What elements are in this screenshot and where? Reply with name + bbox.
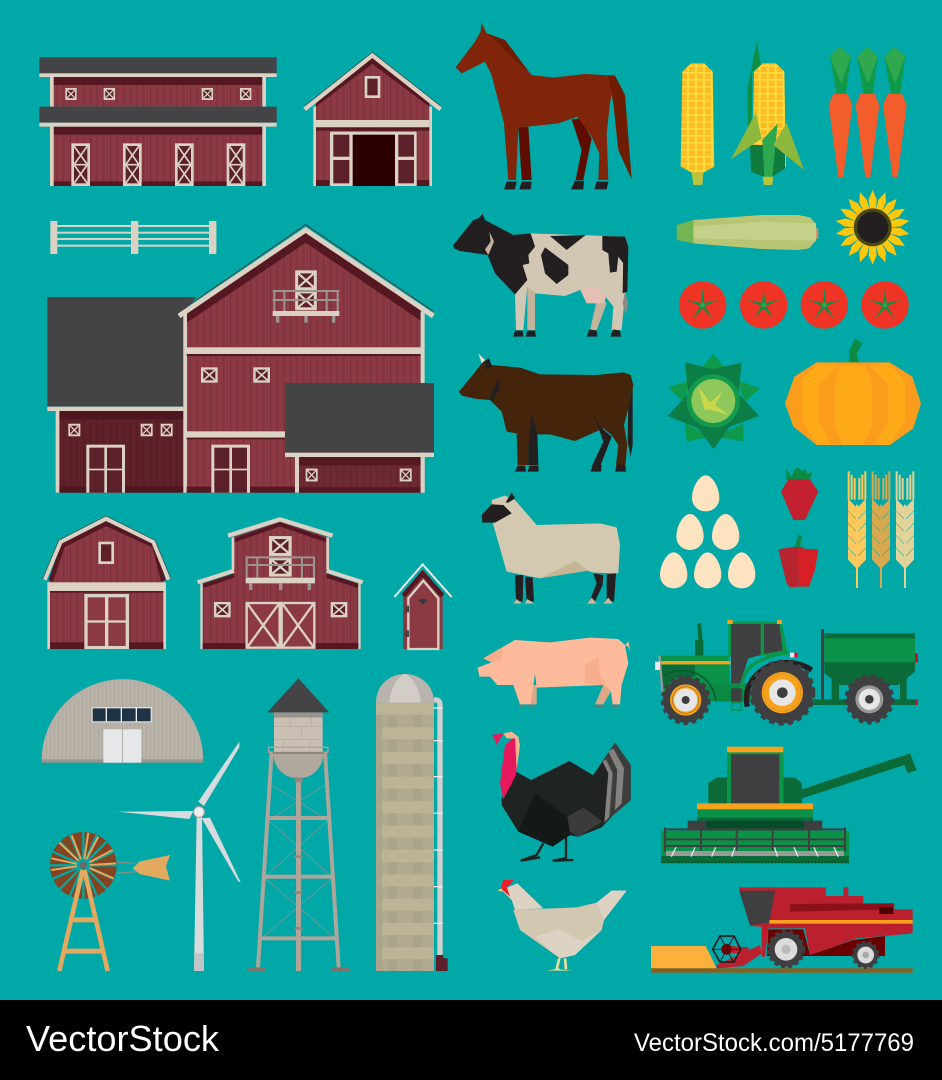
dairy cow bbox=[453, 214, 628, 337]
barn: gambrel small bbox=[43, 516, 171, 649]
combine small wheel bbox=[853, 942, 879, 968]
front tractor wheel bbox=[662, 676, 709, 724]
strawberry bbox=[781, 467, 818, 520]
carrots bbox=[829, 47, 907, 177]
fence bbox=[50, 221, 216, 254]
cabbage bbox=[668, 354, 760, 449]
barn: large main barn bbox=[47, 225, 434, 493]
pumpkin bbox=[785, 338, 921, 445]
tomatoes bbox=[679, 281, 909, 329]
footer url: VectorStock.com/5177769 bbox=[634, 1029, 914, 1057]
footer bar bbox=[0, 1000, 942, 1080]
outhouse bbox=[394, 564, 452, 649]
water tower bbox=[248, 678, 349, 971]
wind turbine bbox=[118, 742, 241, 971]
quonset hut bbox=[42, 679, 203, 763]
wheat bbox=[848, 471, 914, 588]
loft door and balcony bbox=[273, 270, 339, 323]
turkey bbox=[492, 732, 631, 861]
corn cob bbox=[681, 63, 714, 185]
sheep bbox=[482, 492, 620, 604]
zucchini bbox=[677, 215, 818, 250]
barn: small gable with dark door bbox=[305, 52, 441, 186]
rear tractor wheel bbox=[751, 661, 814, 724]
combine large wheel bbox=[768, 931, 804, 967]
barn: two-storey long stable bbox=[39, 57, 277, 186]
sunflower bbox=[835, 190, 910, 265]
barn: tiered gambrel bbox=[198, 519, 363, 649]
hen bbox=[498, 880, 627, 971]
pig bbox=[478, 638, 631, 707]
horse bbox=[456, 23, 632, 189]
windmill bbox=[50, 832, 170, 971]
brown cow bbox=[459, 353, 633, 472]
eggs bbox=[660, 475, 755, 588]
red pepper bbox=[778, 535, 818, 587]
silo bbox=[376, 674, 448, 971]
green combine harvester bbox=[661, 747, 917, 863]
reel bbox=[713, 936, 741, 962]
trailer wheel bbox=[846, 676, 893, 723]
corn with husk bbox=[731, 42, 804, 185]
footer logo: VectorStock bbox=[26, 1018, 220, 1059]
tractor with trailer bbox=[655, 620, 918, 724]
red combine harvester bbox=[651, 887, 913, 973]
